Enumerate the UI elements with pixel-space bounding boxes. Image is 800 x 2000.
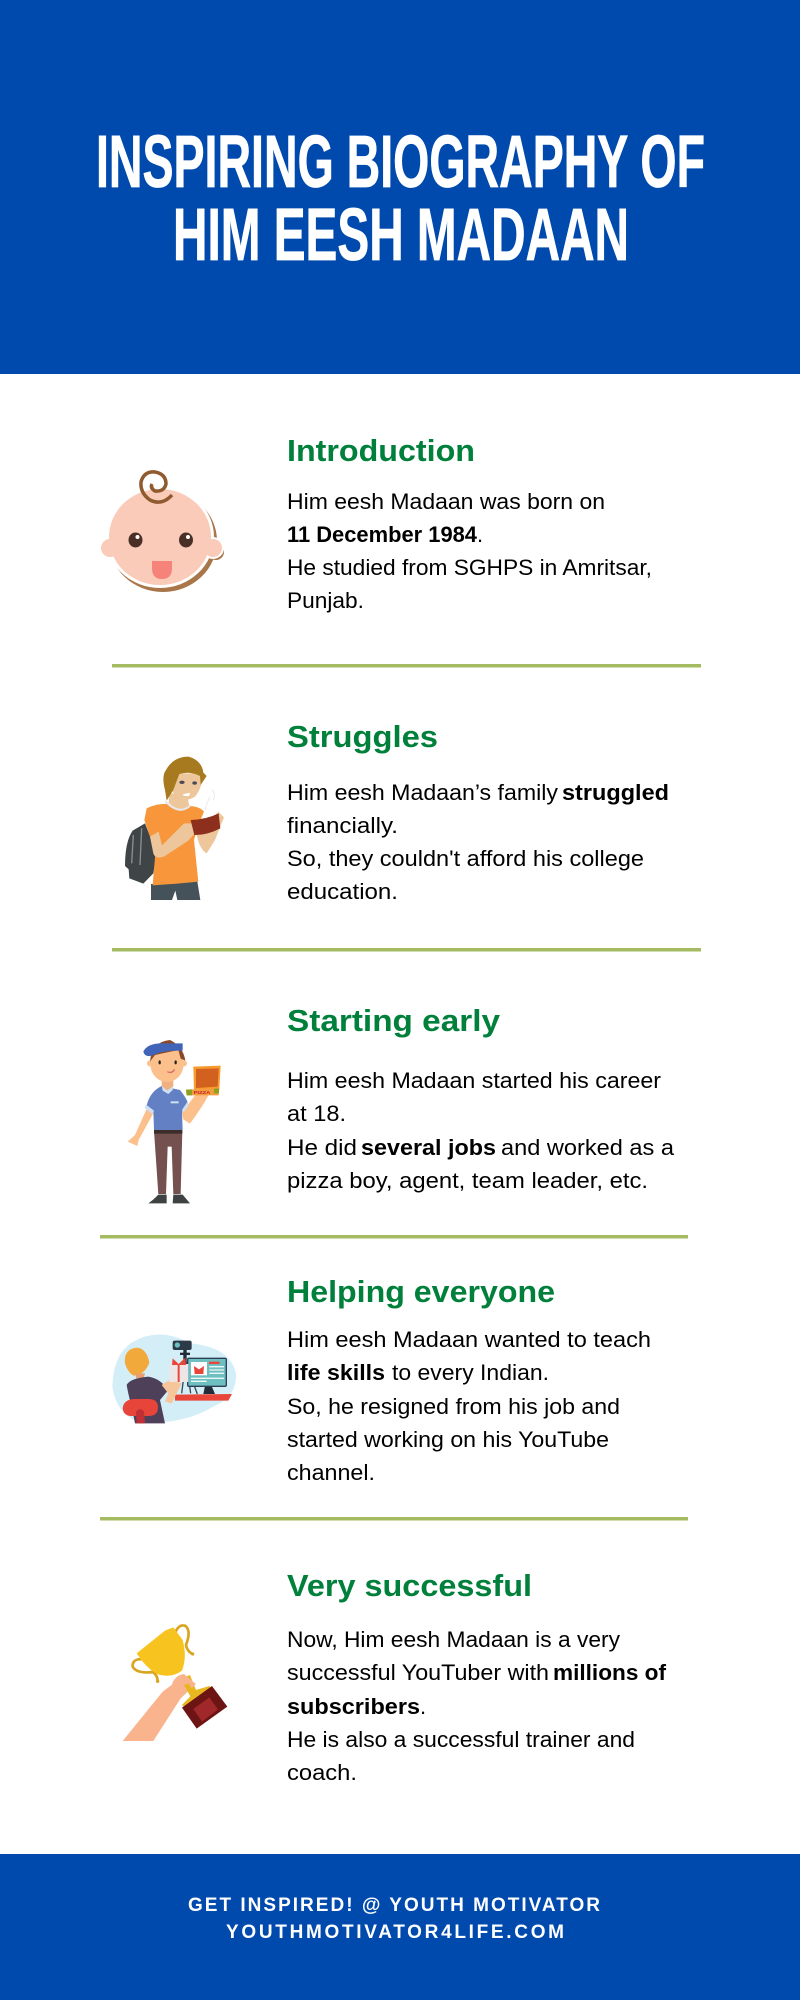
text block: very successful: . [420,1694,426,1719]
text block: very successful: He is also a successful trainer and [287,1727,635,1752]
panel: helping everyone [112,1274,651,1485]
heading: Struggles: Struggles [287,719,438,754]
heading: Starting early: Starting early [287,1003,501,1038]
text block: struggles: financially. [287,813,398,838]
icon: pizza delivery boy [128,1040,221,1203]
text block: very successful: subscribers [287,1694,420,1719]
text block: helping everyone: Him eesh Madaan wanted to teach [287,1327,651,1352]
icon: student with empty wallet [125,757,224,900]
footer banner [0,1854,800,2000]
text block: starting early: He did [287,1135,357,1160]
text block: starting early [287,1068,675,1193]
text block: struggles [287,780,669,904]
text block: struggles: So, they couldn't afford his college [287,846,644,871]
text block: very successful: millions of [553,1660,667,1685]
heading: Helping everyone: Helping everyone [287,1274,555,1309]
text block: very successful [287,1627,667,1785]
panel: struggles [125,719,669,904]
heading: Introduction: Introduction [287,433,475,468]
text block: starting early: pizza boy, agent, team leader, etc. [287,1168,648,1193]
text block: starting early: several jobs [361,1135,496,1160]
panel: introduction [99,433,652,613]
text block: introduction: 11 December 1984 [287,522,478,547]
panel: starting early [128,1003,675,1203]
footer text: YOUTHMOTIVATOR4LIFE.COM [226,1922,564,1943]
text block: introduction: He studied from SGHPS in Amritsar, [287,555,652,580]
text block: starting early: Him eesh Madaan started his career [287,1068,661,1093]
footer text: GET INSPIRED! @ YOUTH MOTIVATOR [188,1895,600,1916]
text block: helping everyone [287,1327,651,1485]
icon: youtuber filming at a desk [112,1335,236,1423]
text block: introduction: Him eesh Madaan was born on [287,489,605,514]
panel: very successful [123,1568,667,1785]
text block: struggles: struggled [562,780,669,805]
text block: starting early: at 18. [287,1101,346,1126]
text block: introduction: . [477,522,483,547]
header banner [0,0,800,374]
text block: helping everyone: life skills [287,1360,385,1385]
text block: starting early: and worked as a [501,1135,675,1160]
text block: helping everyone: So, he resigned from his job and [287,1394,620,1419]
icon: hand holding trophy [123,1625,227,1741]
text block: very successful: successful YouTuber with [287,1660,549,1685]
icon: pizza delivery boy: PIZZA [194,1090,211,1096]
text block: helping everyone: channel. [287,1460,375,1485]
text block: struggles: Him eesh Madaan’s family [287,780,558,805]
text block: introduction [287,489,652,613]
heading: Very successful: Very successful [287,1568,532,1603]
text block: struggles: education. [287,879,398,904]
text block: very successful: coach. [287,1760,357,1785]
text block: introduction: Punjab. [287,588,364,613]
icon: baby face [99,472,224,592]
footer text [188,1895,600,1943]
title [96,120,705,276]
text block: helping everyone: started working on his YouTube [287,1427,609,1452]
text block: helping everyone: to every Indian. [392,1360,549,1385]
text block: very successful: Now, Him eesh Madaan is a very [287,1627,620,1652]
